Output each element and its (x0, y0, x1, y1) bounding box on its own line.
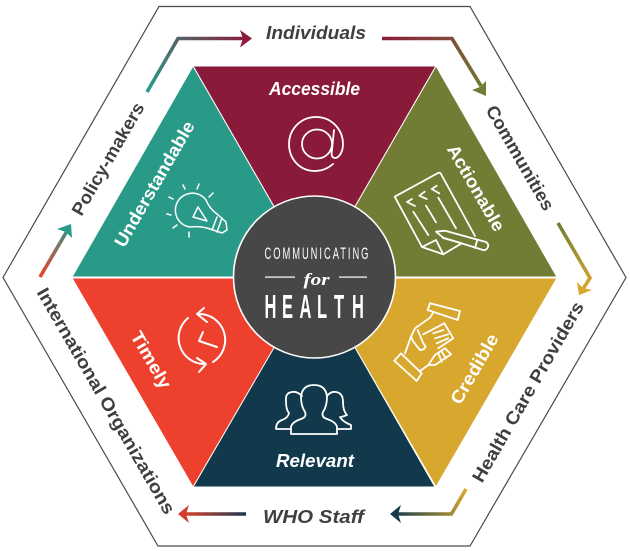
icon: group of people (276, 385, 351, 434)
icon: light bulb (167, 184, 227, 237)
icon: clock with cycle arrows (179, 308, 225, 372)
label: Credible: Credible (446, 330, 503, 408)
arrow: WHO staff to international organizations (178, 505, 246, 523)
icon: handshake (394, 303, 460, 381)
label: Relevant: Relevant (276, 451, 355, 471)
label: Actionable: Actionable (443, 141, 509, 235)
label: Understandable: Understandable (110, 118, 199, 250)
label: Health Care Providers: Health Care Providers (468, 298, 588, 486)
label: International Organizations: International Organizations (33, 284, 179, 518)
arrow: individuals to communities (382, 38, 486, 96)
label: Accessible: Accessible (268, 79, 360, 99)
label: WHO Staff: WHO Staff (263, 507, 366, 527)
panel: Relevant (193, 277, 435, 487)
panel: Understandable (72, 66, 314, 277)
arrow: policy-makers to individuals (147, 30, 252, 92)
panel: Actionable (314, 66, 557, 277)
arrow: health care providers to WHO staff (390, 489, 466, 523)
label: Timely: Timely (127, 328, 175, 392)
center line: COMMUNICATING: COMMUNICATING (264, 244, 368, 263)
icon: at sign (289, 117, 343, 171)
label: Communities: Communities (482, 102, 558, 214)
arrow: communities to health care providers (558, 223, 592, 295)
label: Policy-makers: Policy-makers (68, 99, 148, 219)
panel: Timely (72, 278, 314, 487)
label: Individuals: Individuals (266, 23, 366, 43)
icon: checklist and pencil (395, 173, 488, 254)
center line: HEALTH: HEALTH (264, 288, 364, 326)
panel: Credible (314, 278, 557, 487)
panel: Accessible (193, 66, 436, 277)
center line: for: for (304, 270, 330, 289)
center circle: Communicating for Health (234, 196, 396, 358)
arrow: international organizations to policy-makers (40, 224, 72, 277)
